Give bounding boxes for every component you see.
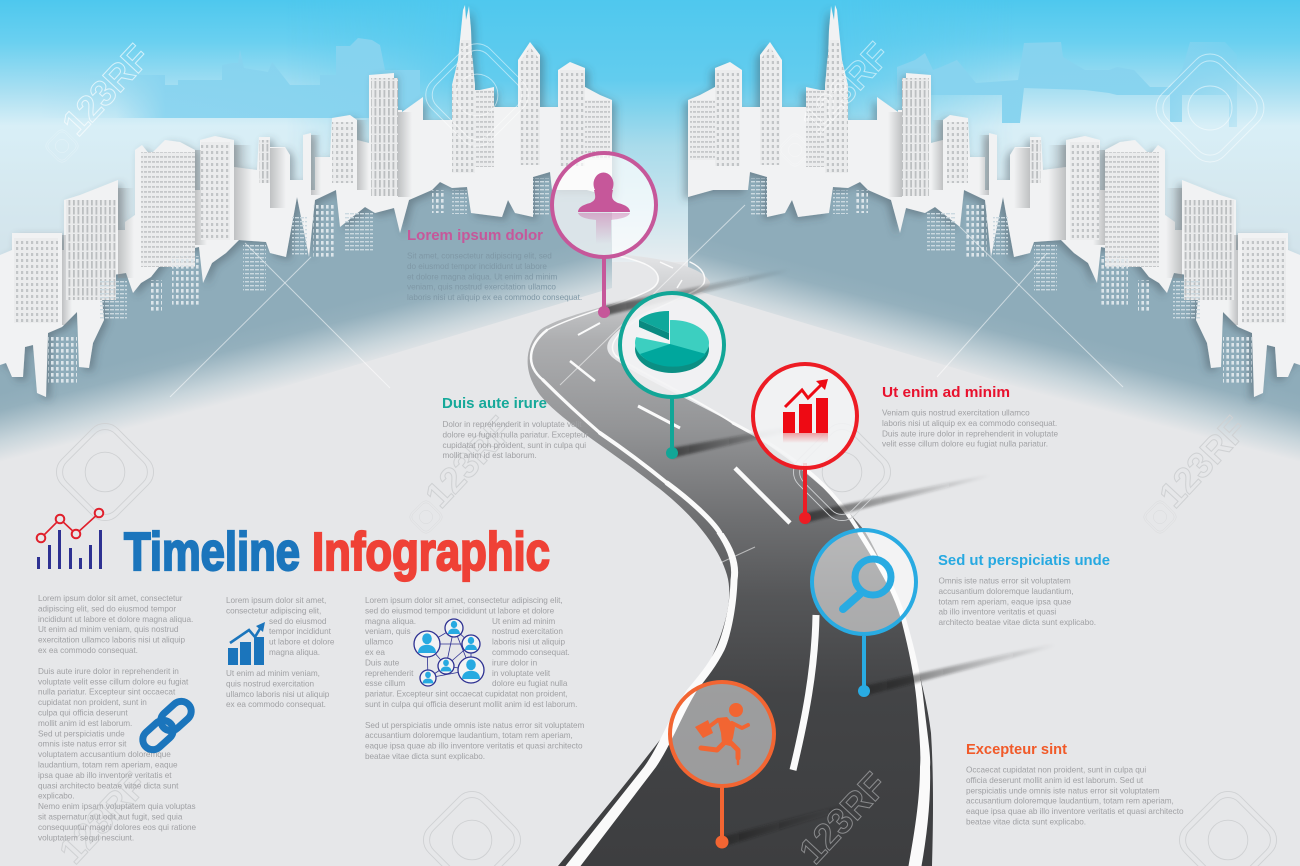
- road surface: [528, 254, 933, 866]
- text column 1: incididunt ut labore et dolore magna aliqua.: [38, 615, 193, 624]
- icon: people network: [414, 619, 484, 686]
- text column 1: laudantium, totam rem aperiam, eaque: [38, 760, 178, 770]
- pin shadows on the ground: [604, 268, 1055, 847]
- text column 3: beatae vitae dicta sunt explicabo.: [365, 752, 485, 761]
- text column 1: ipsa quae ab illo inventore veritatis et: [38, 771, 172, 780]
- text column 2: ullamco laboris nisi ut aliquip: [226, 690, 330, 699]
- block: Lorem ipsum dolor: [407, 227, 582, 302]
- text column 3: ullamco: [365, 638, 393, 647]
- text column 2: quis nostrud exercitation: [226, 679, 314, 688]
- body text: beatae vitae dicta sunt explicabo.: [966, 818, 1086, 826]
- block: Duis aute irure: Duis aute irure: [442, 395, 547, 412]
- building shadows: [62, 112, 412, 325]
- block: Sed ut perspiciatis unde: Sed ut perspiciatis unde: [938, 552, 1110, 569]
- watermark stamps: 123RF: [1151, 408, 1255, 515]
- title: [124, 522, 550, 582]
- icon: running man with briefcase: [695, 703, 748, 764]
- text column 2: magna aliqua.: [269, 648, 320, 657]
- right edge line, lower: [900, 617, 930, 866]
- white paper skyline: [0, 5, 612, 397]
- thin diagonal watermark lines: [170, 205, 1123, 563]
- title: Infographic: [312, 522, 550, 582]
- icon: title line and bar chart: [37, 509, 103, 569]
- text column 1: exercitation ullamco laboris nisi ut aliquip: [38, 636, 186, 645]
- body text: veniam, quis nostrud exercitation ullamco: [407, 283, 556, 292]
- block: Ut enim ad minim: [882, 384, 1058, 449]
- text column 3: Duis aute: [365, 658, 400, 667]
- text column 2: Ut enim ad minim veniam,: [226, 669, 320, 678]
- text column 1: nulla pariatur. Excepteur sint occaecat: [38, 688, 176, 697]
- body text: do eiusmod tempor incididunt ut labore: [407, 262, 547, 271]
- body text: Veniam quis nostrud exercitation ullamco: [882, 408, 1030, 418]
- blue silhouette building windows: [48, 178, 550, 383]
- icon: chain link: [139, 697, 195, 754]
- body text: et dolore magna aliqua. Ut enim ad minim: [407, 272, 558, 281]
- body text: Omnis iste natus error sit voluptatem: [938, 576, 1071, 586]
- text column 1: sit aspernatur aut odit aut fugit, sed quia: [38, 812, 183, 822]
- text column 1: voluptatem accusantium doloremque: [38, 750, 171, 759]
- text column 2: ut labore et dolore: [269, 638, 335, 647]
- text column 1: voluptatem sequi nesciunt.: [38, 833, 134, 842]
- winding road: [528, 254, 933, 866]
- icon: blue growth chart: [228, 622, 265, 665]
- body text: dolore eu fugiat nulla pariatur. Excepteur: [442, 430, 589, 439]
- pin 1: pink person: [552, 153, 656, 318]
- distant light blue skyline, right: [897, 42, 1237, 127]
- pin 2: teal pie chart: [620, 293, 724, 459]
- text column 3: Lorem ipsum dolor sit amet, consectetur adipiscing elit,: [365, 596, 563, 605]
- body text: accusantium doloremque laudantium,: [938, 587, 1074, 596]
- text column 2: ex ea commodo consequat.: [226, 700, 326, 709]
- body text: mollit anim id est laborum.: [442, 451, 537, 460]
- text column 3: commodo consequat.: [492, 648, 570, 657]
- body text: velit esse cillum dolore eu fugiat nulla pariatur.: [882, 440, 1048, 449]
- text column 1: explicabo.: [38, 792, 75, 801]
- body text: laboris nisi ut aliquip ex ea commodo consequat.: [882, 419, 1057, 428]
- text column 3: eaque ipsa quae ab illo inventore veritatis et quasi architecto: [365, 742, 583, 751]
- block: Duis aute irure: [442, 395, 589, 460]
- text column 3: magna aliqua.: [365, 617, 416, 626]
- text column 2: sed do eiusmod: [269, 617, 327, 626]
- pin 5: orange runner: [670, 682, 774, 848]
- icon: bar chart with arrow: [783, 379, 828, 443]
- stem: [602, 258, 606, 312]
- text column 1: Duis aute irure dolor in reprehenderit in: [38, 667, 179, 676]
- text column 3: ex ea: [365, 648, 385, 657]
- text column 3: sed do eiusmod tempor incididunt ut labore et dolore: [365, 606, 555, 615]
- text column 1: voluptate velit esse cillum dolore eu fugiat: [38, 677, 189, 686]
- block: Sed ut perspiciatis unde: [938, 552, 1110, 627]
- text column 3: dolore eu fugiat nulla: [492, 679, 568, 688]
- text column 1: Lorem ipsum dolor sit amet, consectetur: [38, 594, 183, 603]
- text column 3: accusantium doloremque laudantium, totam rem aperiam,: [365, 731, 573, 740]
- central saturated sky: [306, 21, 994, 262]
- text column 3: nostrud exercitation: [492, 627, 563, 636]
- text column 1: cupidatat non proident, sunt in: [38, 698, 147, 707]
- text column 3: Ut enim ad minim: [492, 617, 555, 626]
- left edge line, lower: [566, 533, 738, 866]
- icon: pie chart: [635, 311, 709, 373]
- body text: Occaecat cupidatat non proident, sunt in culpa qui: [966, 766, 1146, 774]
- watermark stamps: 123RF: [417, 408, 521, 515]
- block: Ut enim ad minim: Ut enim ad minim: [882, 384, 1010, 401]
- centre dashes: [570, 262, 816, 770]
- text column 1: consequuntur magni dolores eos qui ratione: [38, 823, 197, 832]
- body text: ab illo inventore veritatis et quasi: [938, 608, 1056, 617]
- text column 2: consectetur adipiscing elit,: [226, 606, 321, 615]
- body text: laboris nisi ut aliquip ex ea commodo consequat.: [407, 293, 582, 302]
- text column 1: Nemo enim ipsam voluptatem quia voluptas: [38, 802, 196, 811]
- right paper-cut city: [688, 5, 1300, 472]
- text column 1: Ut enim ad minim veniam, quis nostrud: [38, 625, 179, 634]
- text column 3: sunt in culpa qui officia deserunt mollit anim id est laborum.: [365, 700, 577, 709]
- block: Excepteur sint: [966, 741, 1184, 826]
- text column 1: quasi architecto beatae vitae dicta sunt: [38, 781, 179, 790]
- title: Timeline: [124, 522, 300, 582]
- text column 3: Sed ut perspiciatis unde omnis iste natus error sit voluptatem: [365, 721, 585, 730]
- text column 3: veniam, quis: [365, 627, 411, 636]
- body text: Dolor in reprehenderit in voluptate velit: [442, 420, 582, 429]
- text column 3: in voluptate velit: [492, 669, 551, 678]
- blue-grey shaded wall: [0, 150, 612, 472]
- right edge line, upper: [612, 262, 903, 617]
- text column 3: reprehenderit: [365, 669, 414, 678]
- dot: [598, 306, 610, 318]
- text column 2: tempor incididunt: [269, 627, 332, 636]
- icon: person: [578, 172, 630, 244]
- text column 1: mollit anim id est laborum.: [38, 719, 132, 728]
- icon: magnifying glass: [843, 559, 891, 609]
- watermark stamps: 123RF: [54, 36, 158, 143]
- left paper-cut city: [0, 5, 612, 472]
- body text: perspiciatis unde omnis iste natus error sit voluptatem: [966, 786, 1160, 795]
- heading: Lorem ipsum dolor: [407, 227, 543, 244]
- body text: architecto beatae vitae dicta sunt explicabo.: [938, 618, 1096, 627]
- text column 1: ex ea commodo consequat.: [38, 646, 138, 655]
- watermark stamps: 123RF: [794, 34, 898, 141]
- body text: cupidatat non proident, sunt in culpa qui: [442, 441, 586, 450]
- distant light blue skyline, left: [40, 38, 420, 118]
- body text: eaque ipsa quae ab illo inventore veritatis et quasi architecto: [966, 807, 1184, 816]
- text column 1: omnis iste natus error sit: [38, 740, 127, 749]
- body text: officia deserunt mollit anim id est laborum. Sed ut: [966, 776, 1144, 785]
- block: Excepteur sint: Excepteur sint: [966, 741, 1067, 758]
- body text: Sit amet, consectetur adipiscing elit, sed: [407, 252, 552, 260]
- ring: [552, 153, 656, 257]
- body text: accusantium doloremque laudantium, totam rem aperiam,: [966, 797, 1174, 806]
- body text: totam rem aperiam, eaque ipsa quae: [938, 597, 1072, 606]
- text column 2: Lorem ipsum dolor sit amet,: [226, 596, 326, 605]
- text column 1: Sed ut perspiciatis unde: [38, 729, 125, 738]
- text column 3: irure dolor in: [492, 658, 538, 667]
- white building windows: [14, 40, 610, 323]
- text column 1: adipiscing elit, sed do eiusmod tempor: [38, 604, 176, 613]
- text column 3: esse cillum: [365, 679, 405, 688]
- body text: Duis aute irure dolor in reprehenderit in voluptate: [882, 429, 1058, 438]
- text column 3: pariatur. Excepteur sint occaecat cupidatat non proident,: [365, 690, 568, 699]
- text column 1: culpa qui officia deserunt: [38, 708, 128, 718]
- text column 3: laboris nisi ut aliquip: [492, 638, 566, 647]
- left edge line, upper: [531, 256, 720, 533]
- background sky: [0, 0, 1300, 300]
- floor plane: [0, 262, 1300, 866]
- pin 4: blue magnifier: [812, 530, 916, 697]
- pin 3: red growth chart: [753, 364, 857, 524]
